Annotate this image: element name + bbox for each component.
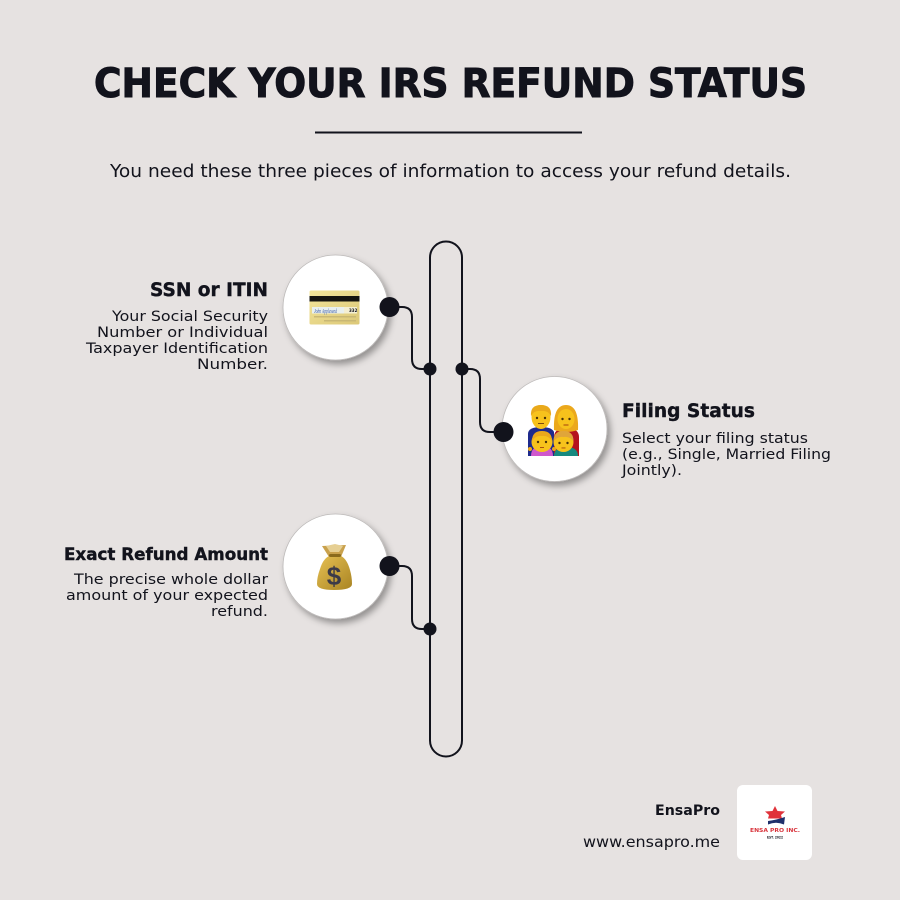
text: refund description: refund. (211, 604, 268, 620)
logo: EST. 2022 (767, 836, 783, 840)
connector: SSN to track (390, 307, 436, 376)
icon circle: credit card (283, 255, 400, 360)
icon circle: money bag (283, 514, 400, 619)
heading: Exact Refund Amount: Exact Refund Amount (64, 545, 268, 564)
text: SSN description (85, 309, 268, 373)
text: SSN description: Taxpayer Identification (85, 341, 268, 357)
mother (554, 405, 579, 456)
text: refund description: amount of your expected (66, 588, 268, 604)
text: filing status description: (e.g., Single, Married Filing (622, 447, 831, 463)
icon circle: money bag: $ (327, 561, 342, 591)
item: SSN or ITIN (85, 255, 399, 373)
icon circle: credit card: 332 (349, 308, 358, 313)
item: Exact Refund Amount (64, 514, 400, 620)
logo: ENSA PRO INC. (750, 828, 800, 834)
connector: filing status to track (456, 362, 503, 432)
heading: Filing Status: Filing Status (622, 400, 755, 422)
text: SSN description: Number or Individual (97, 325, 268, 341)
footer brand (583, 785, 812, 860)
son (554, 431, 578, 456)
text: filing status description: Select your filing status (622, 431, 808, 447)
text: filing status description (621, 431, 831, 479)
logo (737, 785, 812, 860)
text: refund description (66, 572, 268, 620)
website: www.ensapro.me (583, 833, 720, 851)
heading: SSN or ITIN: SSN or ITIN (150, 279, 268, 301)
brand name: EnsaPro (655, 803, 720, 819)
connector: refund amount to track (390, 566, 436, 636)
subtitle: You need these three pieces of information to access your refund details. (109, 161, 791, 182)
text: filing status description: Jointly). (621, 463, 682, 479)
central pill track (430, 242, 462, 756)
icon circle: family (494, 376, 607, 482)
icon circle: credit card: John Appleseed (314, 309, 338, 315)
title: CHECK YOUR IRS REFUND STATUS (94, 61, 807, 107)
item: Filing Status (494, 376, 831, 482)
text: refund description: The precise whole dollar (73, 572, 268, 588)
daughter (528, 431, 556, 456)
father (528, 405, 554, 456)
text: SSN description: Your Social Security (111, 309, 268, 325)
text: SSN description: Number. (197, 357, 268, 373)
